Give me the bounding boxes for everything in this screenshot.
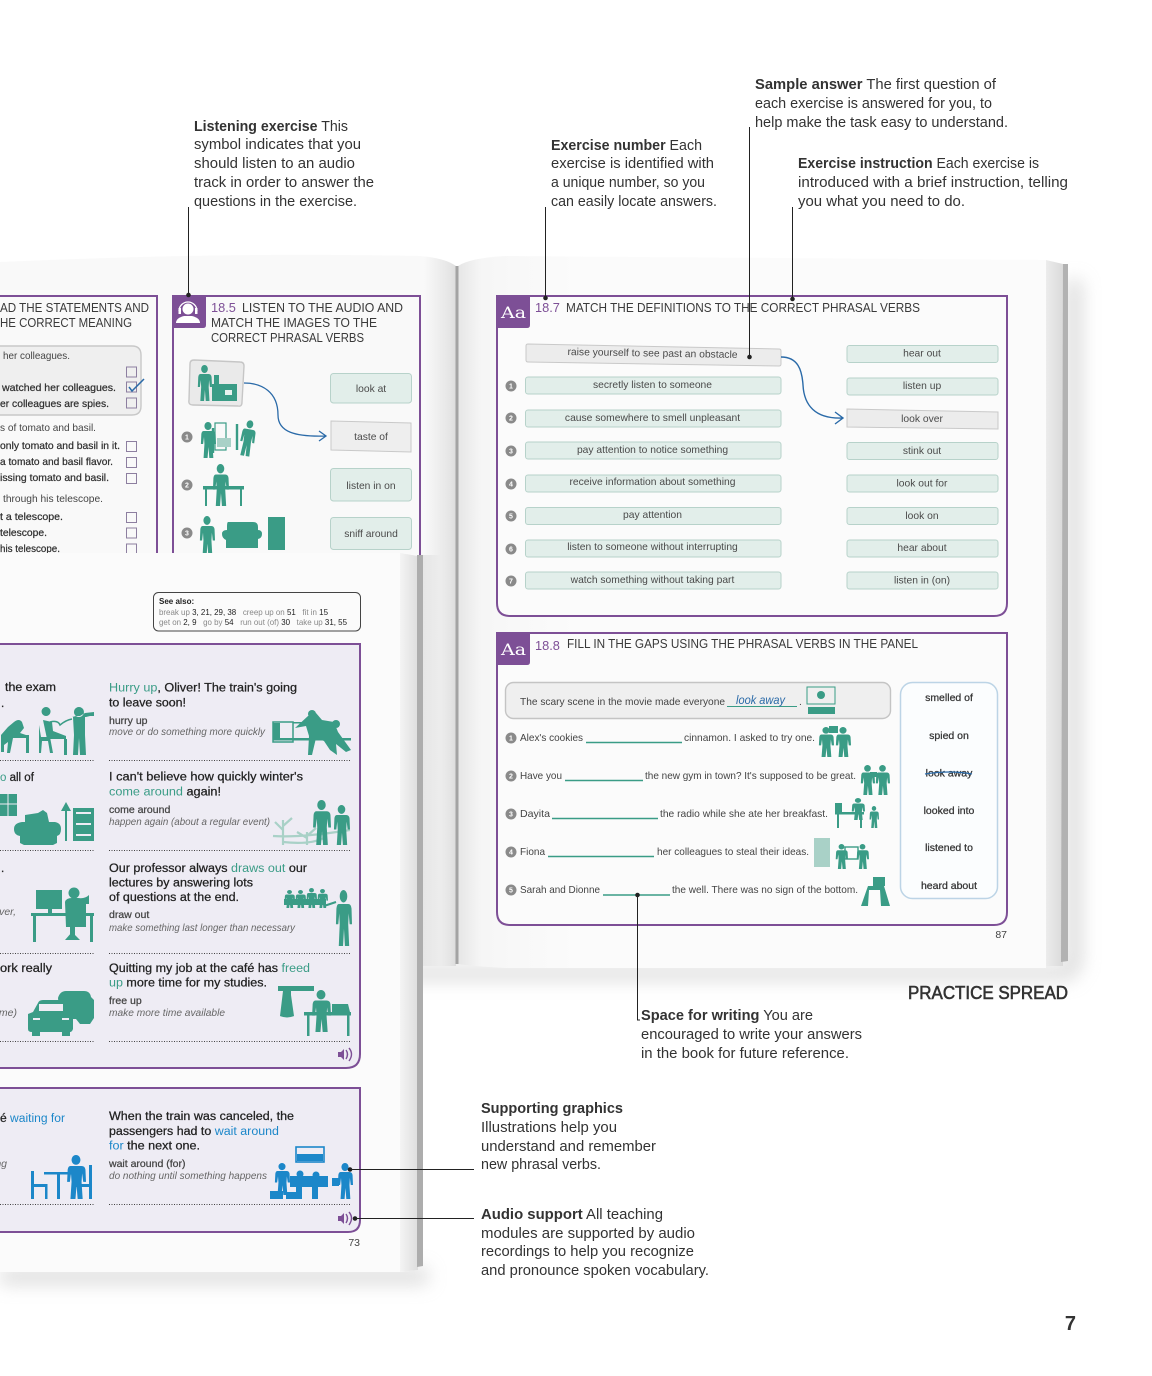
callout: audio support	[481, 1207, 709, 1279]
exercise 18.8 panel: FILL IN THE GAPS USING THE PHRASAL VERBS IN THE PANEL	[567, 636, 918, 651]
sentence: draw out: lectures by answering lots	[109, 878, 253, 890]
callout: audio support: Audio support All teaching	[481, 1207, 663, 1223]
left exercise panel: AD THE STATEMENTS AND	[0, 300, 149, 315]
sentence rows: Sarah and Dionne	[520, 885, 600, 896]
answer boxes 18.5: taste of	[354, 432, 388, 443]
icon: train passengers with departures board	[270, 1147, 353, 1199]
tab: Aa	[497, 296, 530, 328]
see also box	[154, 592, 360, 631]
sentence: hurry up	[109, 682, 297, 738]
sample definition box: raise yourself to see past an obstacle	[567, 347, 738, 361]
callout: audio support: and pronounce spoken vocabulary.	[481, 1263, 709, 1279]
icon: hurrying people	[273, 710, 351, 755]
callout: audio support: modules are supported by audio	[481, 1226, 695, 1242]
sentence: wait around	[108, 1111, 294, 1182]
definition boxes: receive information about something	[570, 477, 736, 488]
book shadow	[0, 280, 1082, 1284]
callout: listening exercise: symbol indicates that you	[194, 137, 361, 153]
icon: winter trees and people	[273, 800, 350, 845]
callout: space for writing: in the book for future reference.	[641, 1046, 849, 1062]
sentence: free up: Quitting my job at the café has freed	[109, 963, 310, 975]
callout: listening exercise: track in order to answer the	[194, 175, 374, 191]
sample sentence box: .	[799, 697, 802, 708]
sentence column left	[0, 682, 56, 1019]
callout: sample answer: Sample answer The first question of	[755, 77, 997, 93]
number markers: 6	[509, 546, 513, 554]
icon: woman with clothes rail	[278, 986, 351, 1036]
sentence rows: Have you	[520, 771, 562, 782]
exercise 18.8 panel	[497, 633, 1007, 941]
sentence: wait around: do nothing until something happens	[109, 1170, 268, 1182]
answer boxes 18.5: sniff around	[344, 529, 398, 540]
sentence rows: 3	[509, 812, 513, 818]
sentence rows: the radio while she ate her breakfast.	[660, 809, 828, 820]
word panel: look away	[926, 768, 973, 780]
left exercise panel: a tomato and basil flavor.	[0, 457, 113, 468]
definition boxes: pay attention	[623, 510, 682, 521]
phrasal verb boxes: look over	[901, 414, 943, 425]
sentence: come around: I can't believe how quickly winter's	[109, 772, 303, 784]
sentence: wait around: wait around (for)	[108, 1158, 185, 1170]
definition boxes: listen to someone without interrupting	[567, 542, 738, 553]
phrasal verb boxes: hear about	[897, 543, 947, 554]
sentence rows: 2	[509, 774, 513, 780]
number markers: 3	[509, 448, 513, 456]
exercise 18.8 panel: 18.8	[535, 638, 560, 653]
sentence: come around: come around	[109, 804, 170, 816]
callout: supporting graphics	[481, 1101, 656, 1173]
sentence: draw out: draw out	[109, 909, 149, 921]
tab: Aa: Aa	[500, 640, 527, 659]
tab: Aa	[497, 633, 530, 665]
answer boxes 18.5: look at	[356, 384, 386, 395]
left exercise panel: er colleagues are spies.	[0, 399, 109, 410]
phrasal verb boxes: stink out	[903, 446, 941, 457]
sentence: hurry up: hurry up	[109, 715, 148, 727]
sentence rows: the new gym in town? It's supposed to be great.	[645, 771, 856, 782]
left exercise panel: his telescope.	[0, 544, 60, 555]
word panel	[900, 682, 998, 898]
sentence: hurry up: Hurry up , Oliver! The train's going	[109, 682, 297, 694]
sentence column left: o all of	[0, 772, 35, 784]
icon: exam students	[1, 707, 94, 755]
callout: space for writing: Space for writing You are	[641, 1008, 813, 1024]
sentence rows: Dayita	[520, 809, 550, 820]
callout: listening exercise: should listen to an audio	[194, 156, 355, 172]
sentence: come around: happen again (about a regular event)	[109, 816, 270, 828]
left exercise panel: through his telescope.	[3, 494, 103, 505]
left exercise panel: t a telescope.	[0, 512, 63, 523]
definition boxes: pay attention to notice something	[577, 445, 728, 456]
teaching panel: blue verbs: é waiting for	[0, 1113, 65, 1125]
icon: person tasting at table	[182, 464, 244, 506]
back left page	[0, 255, 456, 966]
left exercise panel: HE CORRECT MEANING	[0, 315, 132, 330]
page number 7: 7	[1065, 1313, 1076, 1335]
exercise 18.5 panel: LISTEN TO THE AUDIO AND	[242, 300, 403, 315]
left exercise panel: her colleagues.	[3, 351, 70, 362]
see also box: See also:	[159, 597, 194, 606]
icons: sentence illustrations	[814, 726, 890, 906]
front page	[0, 553, 441, 1272]
callout: space for writing	[641, 1008, 862, 1062]
callout: exercise instruction	[798, 156, 1068, 210]
number markers: 4	[509, 482, 513, 488]
icon: cars	[28, 991, 94, 1036]
sentence: free up	[109, 963, 310, 1019]
callout: sample answer: each exercise is answered for you, to	[755, 96, 992, 112]
teaching panel: blue verbs	[0, 1088, 360, 1232]
word panel: smelled of	[925, 692, 973, 704]
right page edge	[1046, 260, 1068, 966]
sentence rows	[506, 732, 858, 896]
sentence column left: .	[1, 698, 4, 710]
word panel: listened to	[925, 842, 973, 854]
arrow: 18.5 sample	[244, 383, 326, 441]
answer boxes 18.5	[330, 374, 412, 550]
number markers: 7	[509, 578, 513, 586]
leader lines	[187, 127, 794, 1220]
sentence: draw out: of questions at the end.	[109, 892, 239, 904]
exercise 18.7 panel: 18.7	[535, 300, 560, 315]
icon: person waiting in cafe	[31, 1155, 92, 1199]
exercise 18.5 panel	[172, 295, 420, 566]
sentence rows: Alex's cookies	[520, 733, 583, 744]
phrasal verb boxes: look out for	[897, 478, 948, 490]
callout: supporting graphics: Illustrations help you	[481, 1120, 617, 1136]
callout: exercise instruction: introduced with a brief instruction, telling	[798, 175, 1068, 191]
exercise 18.7 panel: MATCH THE DEFINITIONS TO THE CORRECT PHRASAL VERBS	[566, 300, 920, 315]
callout: listening exercise: Listening exercise This	[194, 119, 348, 135]
callout: supporting graphics: new phrasal verbs.	[481, 1157, 601, 1173]
spine	[456, 266, 458, 964]
icon: audio speaker	[338, 1212, 352, 1225]
icon: computer desk	[31, 888, 94, 942]
icon: raising hands audience and speaker	[284, 888, 352, 946]
sentence: draw out	[109, 863, 307, 934]
teaching panel: green verbs	[0, 644, 360, 1068]
icon: people with plants: 1	[185, 434, 189, 442]
phrasal verb boxes: look on	[905, 511, 939, 522]
callout: supporting graphics: Supporting graphics	[481, 1101, 623, 1117]
sentence: come around	[109, 772, 303, 828]
sentence rows: Fiona	[520, 847, 545, 858]
sentence: draw out: Our professor always draws out our	[109, 863, 307, 875]
callout: listening exercise	[194, 119, 374, 210]
definition boxes	[526, 377, 781, 589]
see also box: get on 2, 9 go by 54 run out (of) 30 take up 31, 55	[159, 617, 347, 627]
callout: exercise number: can easily locate answers.	[551, 194, 717, 210]
sentence rows: her colleagues to steal their ideas.	[657, 847, 809, 858]
answer boxes 18.5: listen in on	[346, 481, 396, 492]
exercise 18.5 panel: MATCH THE IMAGES TO THE	[211, 315, 377, 330]
sentence: free up: up more time for my studies.	[109, 978, 267, 990]
sentence column left: the exam	[5, 682, 56, 694]
callout: audio support: recordings to help you recognize	[481, 1244, 694, 1260]
definition boxes: cause somewhere to smell unpleasant	[565, 413, 740, 424]
callout: sample answer: help make the task easy to understand.	[755, 115, 1008, 131]
exercise 18.7 panel	[497, 296, 1007, 616]
sentence column left: .	[1, 863, 4, 875]
callout: exercise instruction: you what you need to do.	[798, 194, 965, 210]
exercise 18.5 panel: CORRECT PHRASAL VERBS	[211, 330, 364, 345]
icon: chef sample image	[189, 360, 244, 406]
left exercise panel: issing tomato and basil.	[0, 473, 109, 484]
sentence: free up: free up	[109, 995, 142, 1007]
left exercise panel	[0, 296, 157, 560]
callout: exercise number: Exercise number Each	[551, 138, 702, 154]
phrasal verb boxes: listen in (on)	[894, 576, 950, 586]
number markers: 5	[509, 514, 513, 520]
callout: exercise number: exercise is identified with	[551, 156, 714, 172]
word panel: spied on	[929, 730, 969, 742]
callout: supporting graphics: understand and remember	[481, 1139, 656, 1155]
phrasal verb boxes: hear out	[903, 348, 941, 360]
phrasal verb boxes	[847, 346, 998, 589]
phrasal verb boxes: listen up	[903, 381, 941, 392]
sentence: draw out: make something last longer than necessary	[109, 922, 296, 934]
sample sentence box: The scary scene in the movie made everyone	[520, 697, 725, 708]
sentence rows: the well. There was no sign of the bottom.	[672, 885, 858, 896]
sentence: wait around: for the next one.	[109, 1140, 200, 1152]
page number 73: 73	[348, 1237, 360, 1249]
left exercise panel: telescope.	[0, 528, 47, 539]
callout: exercise number	[551, 138, 717, 210]
page number 87: 87	[995, 929, 1007, 941]
callout: listening exercise: questions in the exercise.	[194, 194, 357, 210]
dotted rules	[0, 760, 351, 1042]
sentence: free up: make more time available	[109, 1007, 225, 1019]
definition boxes: watch something without taking part	[570, 575, 734, 586]
sentence rows: 1	[509, 736, 513, 742]
sentence column left: ork really	[0, 963, 52, 975]
sample sentence box	[506, 682, 890, 718]
icon: person sofa and door	[182, 516, 285, 556]
icon: person sofa and door: 3	[185, 530, 189, 538]
sample definition box	[526, 344, 781, 366]
word panel: looked into	[924, 805, 975, 817]
exercise 18.5 panel: 18.5	[211, 300, 236, 315]
back right page	[458, 256, 1046, 968]
definition boxes: secretly listen to someone	[593, 380, 712, 391]
icon: person tasting at table: 2	[185, 482, 189, 490]
icon: audio speaker	[338, 1048, 352, 1061]
number markers: 2	[509, 416, 513, 422]
heading: practice spread: PRACTICE SPREAD	[908, 983, 1068, 1003]
sentence: wait around: passengers had to wait around	[109, 1126, 279, 1138]
number markers: 1	[509, 384, 513, 390]
number markers	[506, 380, 516, 586]
sentence: hurry up: to leave soon!	[109, 698, 186, 710]
tab: Aa: Aa	[500, 303, 527, 322]
sentence rows: 4	[509, 850, 513, 856]
callout: exercise instruction: Exercise instruction Each exercise is	[798, 156, 1039, 172]
word panel: heard about	[921, 880, 977, 892]
sentence rows: cinnamon. I asked to try one.	[684, 733, 815, 744]
icon: people with plants	[182, 419, 258, 458]
icon: green sofa and furniture	[0, 794, 94, 845]
callout: exercise number: a unique number, so you	[551, 175, 705, 191]
arrow: 18.7 sample	[781, 357, 843, 424]
sentence: come around: come around again!	[109, 786, 221, 798]
see also box: break up 3, 21, 29, 38 creep up on 51 fit in 15	[159, 607, 328, 617]
callout: sample answer	[755, 77, 1008, 131]
left exercise panel: s of tomato and basil.	[0, 423, 96, 434]
left exercise panel: watched her colleagues.	[1, 383, 116, 394]
sample sentence box: look away	[736, 693, 786, 707]
callout: space for writing: encouraged to write your answers	[641, 1027, 862, 1043]
sentence: wait around: When the train was canceled, the	[109, 1111, 294, 1123]
left exercise panel: only tomato and basil in it.	[0, 441, 120, 452]
sentence: hurry up: move or do something more quickly	[109, 726, 266, 738]
sentence rows: 5	[509, 888, 513, 894]
icon: headset tab	[172, 295, 206, 328]
